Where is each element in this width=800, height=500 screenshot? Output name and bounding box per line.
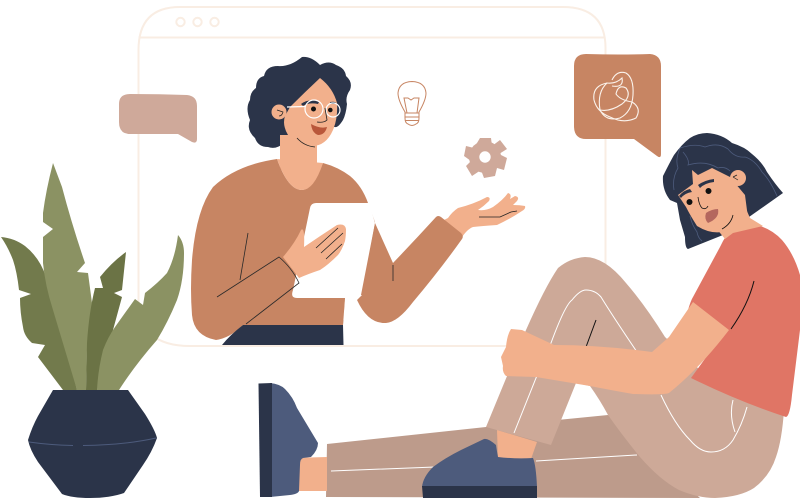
sleeve line: [731, 281, 754, 329]
sleeve lines: [217, 233, 393, 324]
eyes: [311, 107, 333, 112]
browser window frame: [138, 7, 606, 346]
face: [678, 168, 748, 232]
ear: [730, 170, 746, 186]
navy trousers: [222, 325, 344, 345]
hair highlights: [674, 145, 777, 241]
icon: gear: [464, 138, 507, 178]
patient: [258, 133, 800, 498]
open hand: [440, 193, 525, 240]
pot: [28, 390, 157, 498]
eyes: [686, 188, 712, 205]
lips: [705, 209, 718, 223]
plant: [1, 163, 184, 498]
paper sheet: [292, 203, 375, 320]
leaf: back middle: [86, 252, 126, 390]
hand on paper: [283, 224, 346, 278]
back shoe: [258, 383, 318, 497]
jaw line: [722, 215, 733, 229]
outstretched arm: [357, 216, 463, 323]
chin line: [297, 138, 315, 147]
icon: light bulb: [398, 82, 426, 126]
nose: [698, 197, 708, 209]
leaf: right: [97, 235, 184, 390]
t-shirt: [688, 225, 800, 417]
lips: [311, 124, 327, 135]
back leg: [326, 415, 700, 498]
raised leg: [486, 257, 784, 498]
front foot: [497, 430, 537, 459]
eyebrows: [679, 179, 714, 198]
nose: [317, 108, 327, 122]
front shoe: [422, 439, 537, 498]
speech bubble: empty: [119, 94, 197, 143]
sweater bottom under paper: [243, 298, 345, 325]
neck: [716, 195, 763, 239]
hair: [663, 133, 783, 249]
leaf: center: [43, 163, 92, 390]
leg seam lines: [514, 290, 747, 452]
arm: [501, 302, 729, 394]
sweater neckline skin: [277, 159, 323, 190]
knee crease: [586, 320, 596, 347]
sweater body: [191, 159, 375, 340]
glasses: [287, 100, 340, 118]
therapist: [191, 57, 525, 345]
hair back: [248, 57, 351, 148]
back leg crease: [331, 455, 637, 471]
icon: scribble: [594, 72, 638, 121]
neck: [280, 135, 317, 170]
speech bubble: tangled thoughts: [574, 54, 661, 157]
pot rim line: [29, 438, 156, 446]
back foot: [292, 457, 327, 491]
ear: [272, 104, 286, 120]
leaf: left: [1, 237, 77, 390]
eyebrows: [301, 100, 337, 106]
face: [284, 78, 337, 146]
